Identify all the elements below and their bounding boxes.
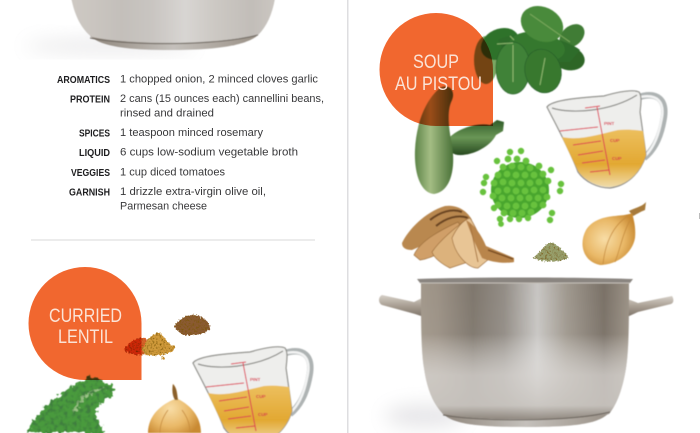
badge title: CURRIED bbox=[49, 306, 122, 327]
broth bbox=[208, 386, 292, 433]
cup glass bbox=[547, 91, 646, 188]
row: protein: PROTEIN bbox=[70, 94, 110, 106]
row: garnish: 1 drizzle extra-virgin olive oil, bbox=[120, 186, 266, 198]
badge shape bbox=[29, 267, 142, 380]
red measure marks bbox=[206, 362, 268, 431]
row: liquid: 6 cups low-sodium vegetable broth bbox=[120, 146, 298, 158]
broth bbox=[562, 130, 646, 187]
pot handle: right bbox=[625, 296, 673, 317]
row: aromatics: AROMATICS bbox=[57, 75, 110, 86]
row: garnish bbox=[69, 186, 266, 212]
row: garnish: GARNISH bbox=[69, 188, 110, 198]
row: veggies bbox=[71, 166, 225, 179]
red measure marks: PINT bbox=[250, 377, 261, 382]
red measure marks: CUP bbox=[258, 412, 268, 417]
icon: red spice pile bbox=[124, 338, 150, 355]
pot rim bbox=[417, 278, 633, 283]
pot handle: left bbox=[379, 295, 424, 317]
icon: zucchini pair bbox=[415, 86, 504, 194]
badge: curried lentil: LENTIL bbox=[58, 327, 113, 348]
row: veggies: 1 cup diced tomatoes bbox=[120, 166, 225, 178]
badge: soup au pistou bbox=[380, 13, 493, 126]
stock pot bbox=[379, 278, 673, 428]
row: spices: SPICES bbox=[79, 128, 110, 140]
icon: kale bbox=[27, 377, 114, 433]
badge: curried lentil bbox=[29, 267, 142, 380]
badge shape bbox=[380, 13, 493, 126]
icon: whole onion (right) bbox=[582, 202, 646, 265]
cup handle bbox=[636, 95, 664, 158]
row: aromatics: 1 chopped onion, 2 minced cloves garlic bbox=[120, 74, 318, 86]
pot base bbox=[442, 412, 610, 427]
red measure marks: CUP bbox=[256, 394, 266, 399]
pot body bbox=[421, 282, 629, 419]
zucchini: lying bbox=[447, 120, 504, 155]
icon: yellow curry pile bbox=[142, 333, 175, 359]
row: garnish: Parmesan cheese bbox=[120, 200, 207, 212]
row: protein bbox=[70, 93, 324, 120]
red measure marks: CUP bbox=[610, 138, 620, 143]
icon: herb pile bbox=[533, 242, 569, 261]
cup glass bbox=[193, 347, 292, 433]
red measure marks bbox=[560, 106, 622, 175]
icon: measuring cup with broth (left) bbox=[193, 347, 310, 433]
row: protein: rinsed and drained bbox=[120, 108, 214, 120]
zucchini: upright bbox=[415, 86, 453, 194]
cup handle bbox=[282, 351, 310, 414]
red measure marks: PINT bbox=[604, 121, 615, 126]
pot shadow bbox=[385, 404, 465, 428]
badge: soup au pistou: AU PISTOU bbox=[395, 74, 482, 95]
row: spices: 1 teaspoon minced rosemary bbox=[120, 127, 263, 139]
stock pot: continued from previous recipe bbox=[25, 0, 276, 53]
badge title: SOUP bbox=[413, 52, 459, 73]
icon: spinach bbox=[474, 0, 589, 97]
icon: whole onion (left) bbox=[148, 384, 201, 433]
icon: measuring cup with broth (right) bbox=[547, 91, 664, 188]
row: liquid: LIQUID bbox=[79, 148, 110, 159]
icon: sliced grilled chicken bbox=[402, 206, 514, 268]
ingredient list bbox=[57, 74, 324, 212]
row: veggies: VEGGIES bbox=[71, 168, 110, 179]
row: protein: 2 cans (15 ounces each) cannellini beans, bbox=[120, 93, 324, 105]
icon: green peas bbox=[480, 148, 564, 226]
icon: brown spice pile bbox=[174, 315, 210, 335]
red measure marks: CUP bbox=[612, 156, 622, 161]
